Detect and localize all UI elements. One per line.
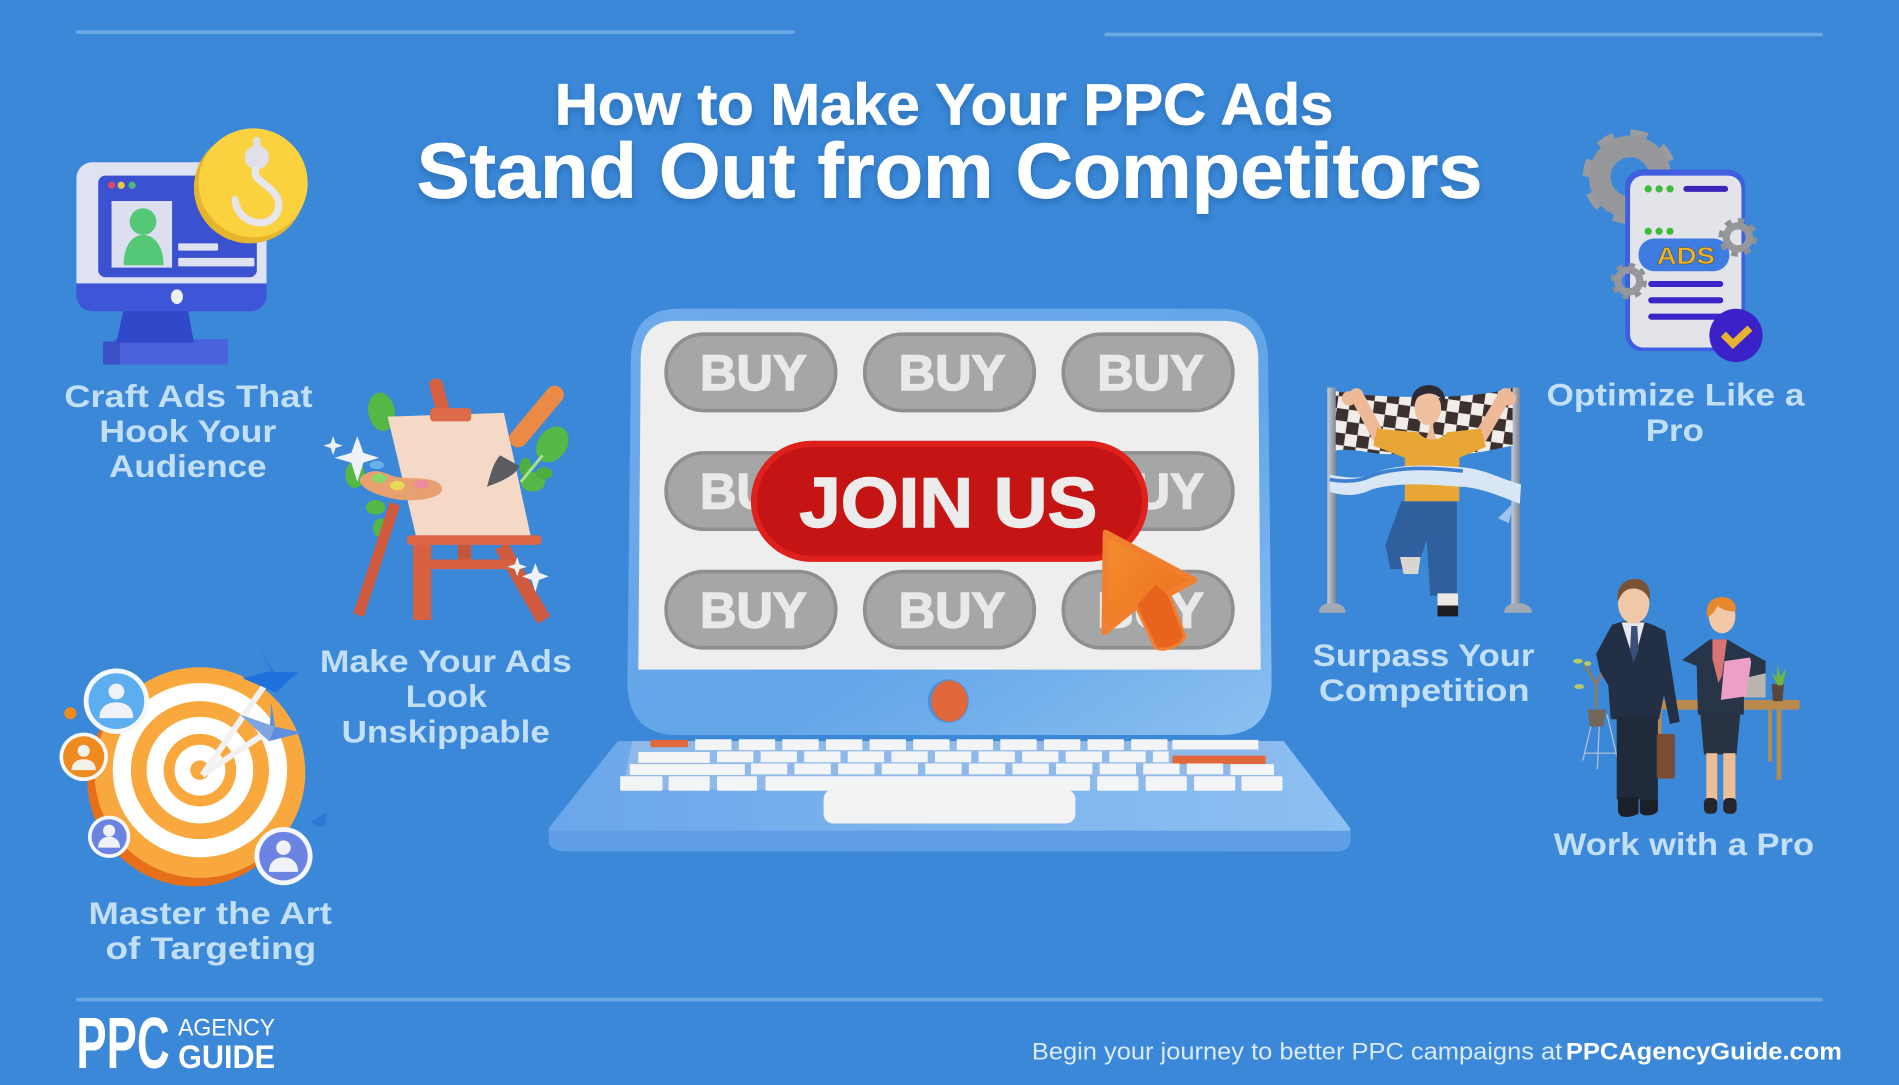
label: master the art: of Targeting [105,931,316,966]
label: surpass: Surpass Your [1313,638,1534,673]
title [417,73,1482,214]
label: make your ads: Make Your Ads [320,644,572,679]
label: surpass: Competition [1319,673,1530,708]
icon: easel, palette and brush [323,385,575,620]
title: How to Make Your PPC Ads [555,73,1333,138]
panel: work with a pro [1554,579,1814,862]
illustration: laptop [549,309,1350,851]
logo: PPC Agency Guide: GUIDE [178,1038,275,1075]
buy buttons: BUY [1097,345,1204,401]
buy buttons: BUY [899,345,1005,401]
buy buttons [666,334,1233,648]
label: craft ads [64,379,313,484]
top left rule [76,30,794,34]
buy buttons: BUY [899,582,1005,638]
label: make your ads: Look [406,679,487,714]
top right rule [1104,33,1823,36]
buy buttons: BUY [700,582,807,638]
label: work with a pro: Work with a Pro [1554,827,1814,862]
logo: PPC Agency Guide: AGENCY [178,1014,275,1041]
logo: PPC Agency Guide: PPC [76,1003,170,1084]
label: make your ads [320,644,572,749]
trackpad [824,790,1075,823]
icon: ads document with gears [1590,137,1763,362]
keyboard [620,740,1283,791]
panel: craft ads that hook [64,128,313,484]
icon: monitor with hook [76,128,308,364]
panel: surpass your competition [1313,385,1534,708]
label: optimize [1546,378,1805,448]
buy buttons: BUY [1097,464,1204,520]
buy buttons: BUY [700,464,807,520]
label: master the art: Master the Art [89,896,333,931]
title: Stand Out from Competitors [417,128,1482,214]
icon: runner crossing finish line [1319,385,1532,616]
label: craft ads: Craft Ads That [64,379,313,414]
laptop base [549,741,1350,851]
buy buttons: BUY [1097,582,1204,638]
label: craft ads: Hook Your [99,414,276,449]
screen [638,321,1261,670]
label: craft ads: Audience [109,449,267,484]
panel: master the art of targeting [59,648,333,966]
join us button: JOIN US [799,463,1097,542]
laptop lid [627,309,1272,735]
label: optimize: Optimize Like a [1546,378,1805,413]
icon: business people at desk [1573,579,1800,817]
footer call to action: Begin your journey to better PPC campaigns at [1032,1039,1563,1066]
icon: sparkles [323,436,549,592]
finish ribbon [1330,465,1521,504]
footer call to action: PPCAgencyGuide.com [1566,1039,1842,1066]
buy buttons: BUY [700,345,807,401]
panel: optimize like a pro [1546,137,1805,448]
icon: ads document with gears: ADS [1657,243,1715,270]
label: surpass [1313,638,1534,708]
panel: make your ads unskippable [320,385,575,749]
join us button [751,441,1148,562]
bottom rule [76,998,1823,1001]
label: make your ads: Unskippable [342,714,550,749]
power button [928,679,969,723]
label: optimize: Pro [1646,413,1704,448]
label: master the art [89,896,333,966]
icon: target with darts and avatars [59,648,327,886]
icon: orange cursor [1104,533,1194,648]
